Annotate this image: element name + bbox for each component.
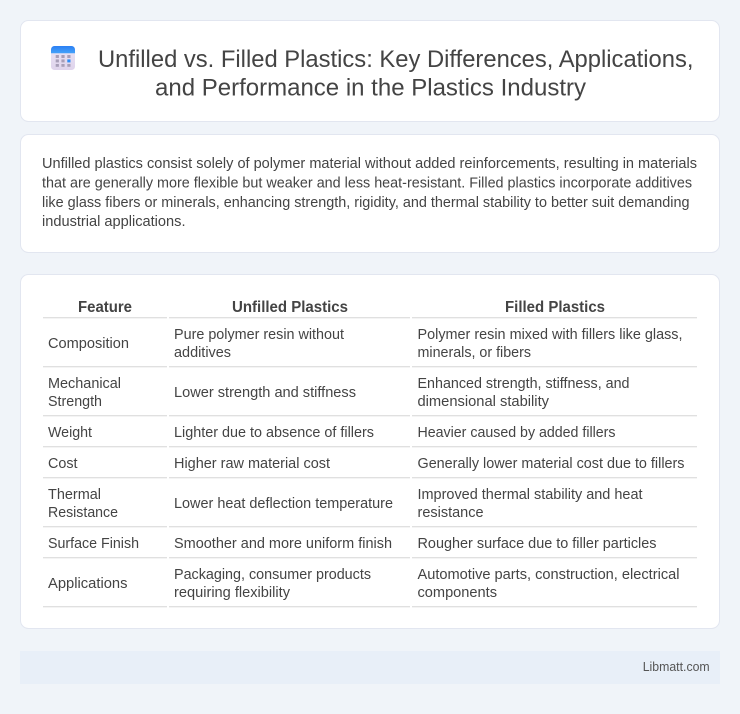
row: mechanical strength: Strength [48, 394, 102, 410]
row: applications: requiring flexibility [174, 585, 291, 601]
panel: introduction [20, 134, 720, 252]
row: applications [48, 567, 680, 601]
row: surface finish: Rougher surface due to filler particles [418, 536, 656, 552]
row: thermal resistance: resistance [418, 505, 484, 521]
row: composition: Composition [48, 336, 129, 352]
row: mechanical strength: Enhanced strength, stiffness, and [418, 376, 630, 392]
text block: introduction: that are generally more flexible but weaker and less heat-resistant. Filled plastics incorporate additives [42, 175, 692, 191]
row: applications: components [418, 585, 497, 601]
text block: introduction: Unfilled plastics consist solely of polymer material without added reinforcements, resulting in materials [42, 156, 697, 172]
row: weight: Weight [48, 425, 92, 441]
row: mechanical strength: dimensional stability [418, 394, 550, 410]
row: surface finish [48, 536, 656, 552]
text block: introduction: like glass fibers or minerals, enhancing strength, rigidity, and thermal stability to better suit demanding [42, 195, 690, 211]
row: applications: Applications [48, 576, 128, 592]
table header: Feature [78, 299, 132, 316]
title: and Performance in the Plastics Industry [155, 74, 587, 102]
row: surface finish: Smoother and more uniform finish [174, 536, 392, 552]
footer: Libmatt.com [643, 660, 710, 674]
row: applications: Packaging, consumer products [174, 567, 371, 583]
row: cost [48, 456, 684, 472]
row: weight: Lighter due to absence of fillers [174, 425, 374, 441]
text block: introduction: industrial applications. [42, 214, 186, 230]
row: composition: minerals, or fibers [418, 345, 531, 361]
row: surface finish: Surface Finish [48, 536, 139, 552]
row: thermal resistance: Improved thermal stability and heat [418, 487, 643, 503]
row: composition: Pure polymer resin without [174, 327, 344, 343]
title [98, 46, 694, 102]
table header: Filled Plastics [505, 299, 605, 316]
icon: calendar [51, 46, 75, 70]
title: Unfilled vs. Filled Plastics: Key Differences, Applications, [98, 46, 694, 73]
row: cost: Generally lower material cost due to fillers [418, 456, 684, 472]
row: thermal resistance [48, 487, 643, 521]
row: weight: Heavier caused by added fillers [418, 425, 616, 441]
row: composition: Polymer resin mixed with fillers like glass, [418, 327, 682, 343]
row: mechanical strength: Lower strength and stiffness [174, 385, 356, 401]
row: thermal resistance: Lower heat deflection temperature [174, 496, 393, 512]
row: mechanical strength [48, 376, 630, 410]
row: thermal resistance: Resistance [48, 505, 118, 521]
text block: introduction [42, 156, 697, 230]
row: composition [48, 327, 682, 361]
table header [78, 299, 605, 316]
row: weight [48, 425, 616, 441]
row: thermal resistance: Thermal [48, 487, 101, 503]
table header: Unfilled Plastics [232, 299, 348, 316]
row: mechanical strength: Mechanical [48, 376, 121, 392]
row: composition: additives [174, 345, 231, 361]
panel: header [20, 20, 720, 122]
footer [20, 651, 720, 684]
row: applications: Automotive parts, construction, electrical [418, 567, 680, 583]
row: cost: Higher raw material cost [174, 456, 330, 472]
row: cost: Cost [48, 456, 78, 472]
panel: comparison table [20, 274, 720, 628]
